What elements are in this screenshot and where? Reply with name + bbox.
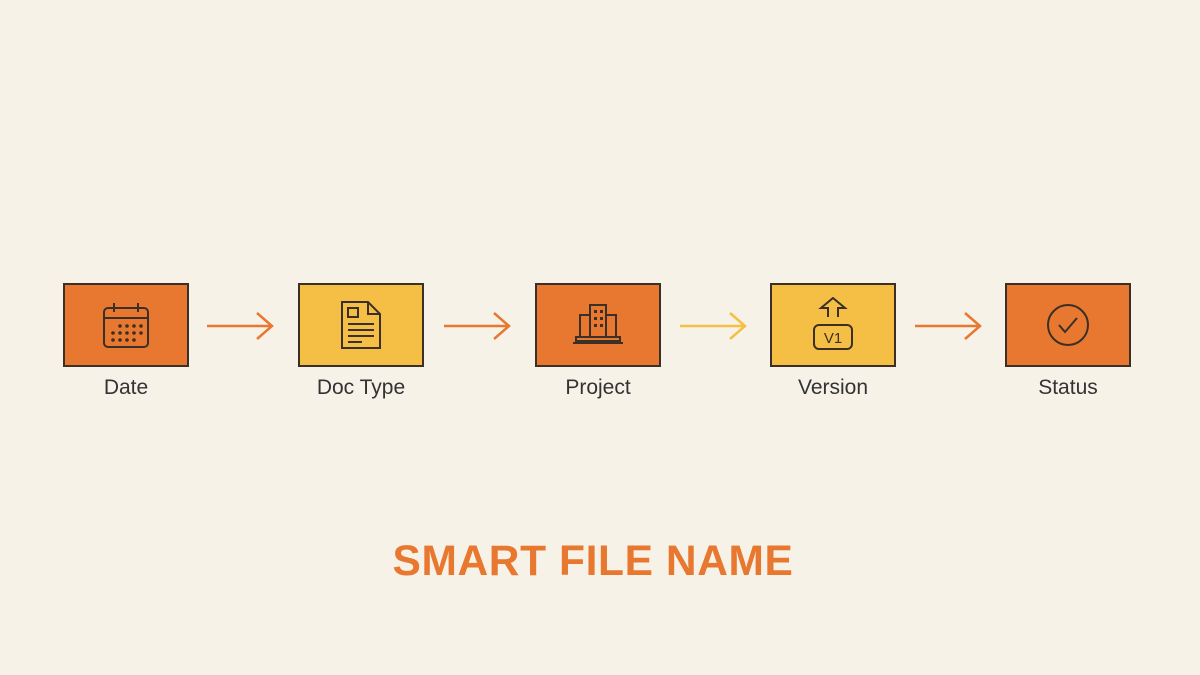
step: Doc Type [298,283,424,367]
icon: building [573,304,623,344]
step: Project [535,283,661,367]
arrow 2 [444,312,511,340]
icon: version up [813,297,853,350]
arrow 1 [207,312,274,340]
label: Doc Type: Doc Type [317,376,405,399]
icon: calendar [103,303,149,348]
title: SMART FILE NAME [393,538,793,585]
step: Status [1005,283,1131,367]
icon: check circle [1047,304,1089,346]
step: Date [63,283,189,367]
label: Date: Date [104,376,148,399]
arrow 3 [680,312,747,340]
arrow 4 [915,312,982,340]
label: Project: Project [565,376,631,399]
label: Version: Version [798,376,868,399]
icon: version up: V1 [824,330,842,347]
step: Version [770,283,896,367]
icon: document [341,301,381,349]
label: Status: Status [1038,376,1098,399]
